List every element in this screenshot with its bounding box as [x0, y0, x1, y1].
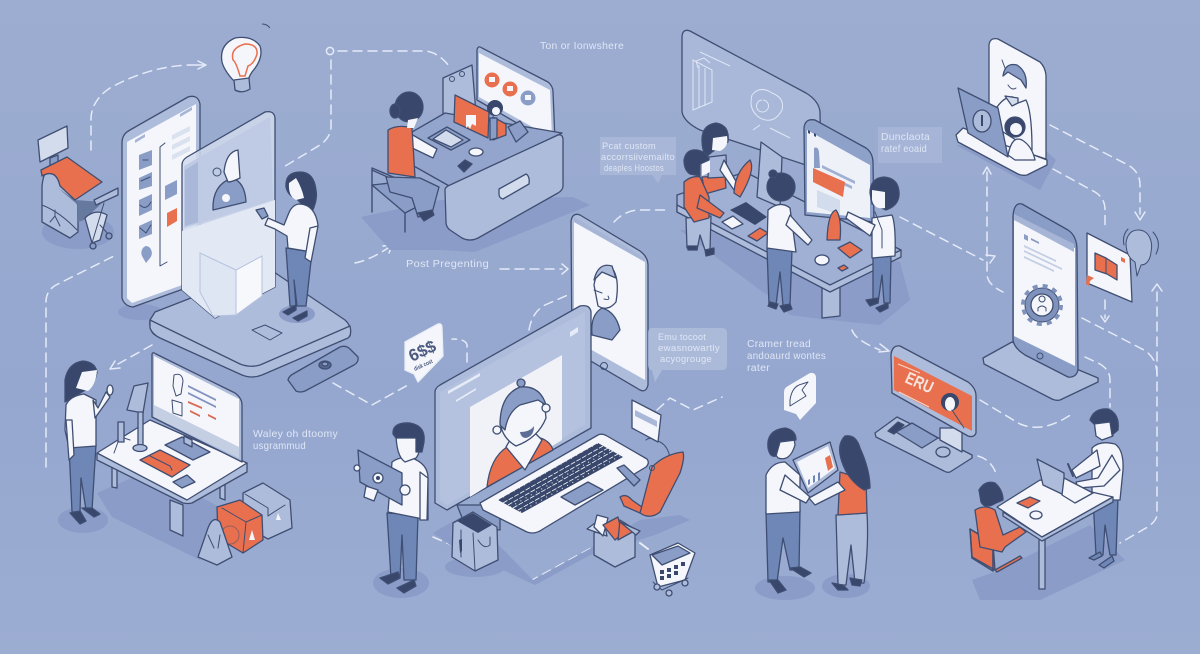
- monitor: [477, 47, 555, 142]
- laptop keyboard: [480, 434, 648, 533]
- standing man: [1068, 409, 1123, 568]
- panel: orange chair and small screen: [620, 400, 684, 516]
- icon: gear: [1023, 286, 1061, 324]
- panel: orange monitor and desk: [875, 346, 976, 472]
- callout: post custom: Pcat custom: [602, 141, 656, 152]
- profile person: [997, 60, 1032, 150]
- panel: settings phone on stand: [983, 204, 1098, 400]
- text: center right label: rater: [747, 362, 770, 374]
- orange tablet: [454, 95, 489, 138]
- right screen: [804, 120, 874, 222]
- panel: left desk with orange cover: [38, 126, 118, 249]
- screen person: [172, 374, 216, 420]
- screen: [435, 306, 591, 510]
- holographic glass panel: [182, 112, 275, 318]
- callout: central label: [648, 328, 727, 382]
- woman in white: [846, 177, 899, 312]
- monitor: [152, 353, 242, 462]
- panel: right work table: [970, 409, 1125, 600]
- text: post programming label: Post Pregenting: [406, 258, 489, 270]
- icon: shopping cart: [640, 543, 695, 596]
- callout: central label: Emu tocoot: [658, 332, 706, 343]
- portrait: [592, 265, 620, 340]
- portrait: [941, 393, 964, 428]
- seated person: [386, 92, 439, 221]
- boy in orange: [684, 150, 724, 256]
- people: couple reviewing tablet: [755, 428, 870, 600]
- text: center right label: andoaurd wontes: [747, 350, 826, 362]
- speech bubble: dollar sign price: [405, 324, 443, 382]
- person: woman by left monitor: [58, 361, 113, 533]
- panel: central monitor with portrait and keyboard: [433, 306, 690, 585]
- holographic woman: [213, 150, 246, 210]
- callout: downloads: Dunclaota: [881, 131, 930, 143]
- icon: notification card: [1086, 233, 1132, 302]
- panel: central phone with portrait: [571, 214, 648, 391]
- laptop: [958, 88, 1008, 157]
- upright screen: [757, 142, 782, 207]
- platform base: [150, 268, 350, 374]
- back legs: [112, 465, 117, 488]
- callout: downloads: ratef eoaid: [881, 143, 927, 155]
- panel: right profile card with laptop: [956, 39, 1056, 190]
- table top: [97, 420, 247, 502]
- speech bubble: dollar sign price: disk cost: [413, 359, 434, 373]
- tablet: [793, 442, 838, 493]
- callout: central label: ewasnowartly: [658, 343, 720, 354]
- dark panel: [443, 65, 477, 125]
- callout: central label: acyogrouge: [660, 354, 712, 365]
- callout: post custom: accorrsiivemailto: [601, 152, 675, 163]
- app icons: [139, 150, 152, 263]
- woman: [809, 436, 870, 590]
- callout: post custom: [600, 137, 676, 183]
- bags and packages: [198, 483, 292, 565]
- icon: shopping bag: [445, 512, 505, 577]
- icon: light bulb: [222, 24, 270, 92]
- tiny person: [487, 100, 506, 140]
- folder: [140, 450, 190, 477]
- person: man with tablet: [354, 423, 429, 598]
- connector arrows: [46, 47, 1162, 580]
- speech bubble: bell: [784, 373, 816, 420]
- child figure: [1005, 117, 1035, 160]
- panel: desk with monitor and seated person: [361, 47, 590, 252]
- desk surface: [412, 113, 562, 187]
- left phone: [122, 96, 200, 307]
- panel: orange monitor and desk: ERU: [902, 369, 936, 398]
- callout: post custom: deaples Hoostos: [604, 163, 664, 174]
- man: [766, 428, 811, 593]
- panel: pill shaped device: [252, 325, 358, 392]
- speech bubble: dollar sign price: 6$$: [406, 336, 440, 366]
- text: left desk label: Waley oh dtoomy: [253, 428, 338, 440]
- callout: downloads: [878, 127, 942, 163]
- woman with tablet: [702, 123, 752, 197]
- panel: left bottom desk with monitor: [97, 353, 247, 560]
- panel: team collaborating at table: [677, 30, 910, 325]
- portrait on screen: [487, 379, 553, 487]
- panel: main phone and holographic kiosk: [118, 96, 351, 377]
- icon: speech bubble: [1124, 229, 1158, 276]
- table: [822, 275, 840, 318]
- text: center right label: Cramer tread: [747, 338, 811, 350]
- text: top label: Ton or Ionwshere: [540, 40, 624, 52]
- data board: [682, 30, 821, 170]
- chair: [372, 168, 430, 232]
- keyboard on table: [730, 202, 767, 225]
- man in white: [767, 170, 812, 312]
- lamp: [127, 383, 148, 452]
- person: woman at kiosk: [256, 172, 318, 323]
- seated person: [970, 482, 1026, 572]
- cabinet: [445, 135, 563, 240]
- text: left desk label: usgrammud: [253, 440, 306, 452]
- icon: open box: [587, 515, 640, 567]
- table: [1039, 537, 1045, 589]
